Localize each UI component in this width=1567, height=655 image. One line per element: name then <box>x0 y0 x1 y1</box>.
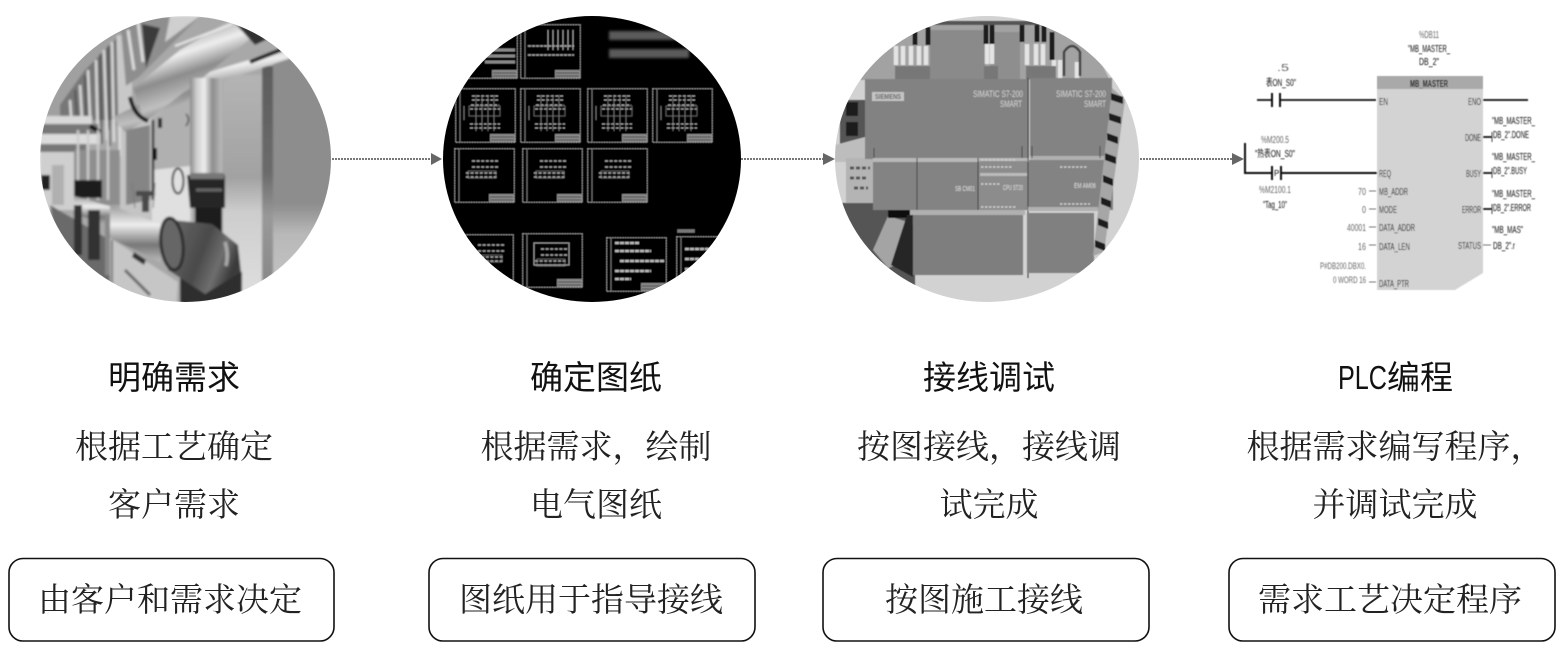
photo: Siemens PLC wiring <box>835 16 1140 303</box>
ladder diagram: MB_MASTER block: MB_MASTER <box>1410 79 1448 90</box>
heading: PLC编程: PLC <box>1338 359 1387 396</box>
text block: step 4 description: 并调试完成 <box>1312 479 1478 526</box>
photo: Siemens PLC wiring: SIMATIC S7-200 <box>1056 89 1106 99</box>
heading: 接线调试: 接线调试 <box>923 360 1055 399</box>
ladder diagram: MB_MASTER block: 40001 <box>1347 223 1366 234</box>
ladder diagram: MB_MASTER block: .5 <box>1277 63 1290 74</box>
photo: Siemens PLC wiring: SIEMENS <box>875 94 901 101</box>
photo: electrical drawings <box>443 16 741 302</box>
ladder diagram: MB_MASTER block: 0 <box>1362 205 1366 216</box>
heading: 确定图纸: 确定图纸 <box>530 360 662 399</box>
ladder diagram: MB_MASTER block: DONE <box>1465 133 1481 144</box>
ladder diagram: MB_MASTER block: 16 <box>1358 242 1366 253</box>
photo: Siemens PLC wiring: SIMATIC S7-200 <box>973 89 1023 99</box>
ladder diagram: MB_MASTER block: ENO <box>1468 97 1481 108</box>
text block: step 2 description: 根据需求，绘制 <box>480 421 712 468</box>
ladder diagram: MB_MASTER block: "Tag_10" <box>1263 200 1287 211</box>
ladder diagram: MB_MASTER block: DB_2".DONE <box>1493 130 1529 141</box>
heading: 明确需求: 明确需求 <box>108 360 240 399</box>
ladder diagram: MB_MASTER block: DB_2" <box>1419 57 1439 68</box>
ladder diagram: MB_MASTER block: DB_2".ERROR <box>1493 203 1531 214</box>
text block: step 4 description: 根据需求编写程序， <box>1246 421 1544 468</box>
ladder diagram: MB_MASTER block: 70 <box>1358 187 1366 198</box>
ladder diagram: MB_MASTER block: 0 WORD 16 <box>1333 275 1366 285</box>
ladder diagram: MB_MASTER block: MB_ADDR <box>1379 187 1408 198</box>
callout: step 3 <box>823 558 1149 641</box>
ladder diagram: MB_MASTER block: DATA_LEN <box>1379 242 1410 253</box>
text block: step 4 description <box>1246 421 1544 526</box>
heading: PLC编程: 编程 <box>1387 360 1453 399</box>
callout: step 1: 由客户和需求决定 <box>38 574 302 621</box>
text block: step 2 description: 电气图纸 <box>530 479 662 526</box>
ladder diagram: MB_MASTER block: "MB_MAS" <box>1492 225 1523 236</box>
ladder diagram: MB_MASTER block: P#DB200.DBX0. <box>1320 261 1366 271</box>
text block: step 1 description <box>75 421 273 526</box>
text block: step 3 description <box>857 421 1121 526</box>
text block: step 2 description <box>480 421 712 526</box>
callout: step 2 <box>429 558 755 641</box>
callout: step 4: 需求工艺决定程序 <box>1258 574 1522 621</box>
photo: Siemens PLC wiring: SMART <box>1084 99 1106 109</box>
ladder diagram: MB_MASTER block: 表ON_S0" <box>1266 76 1296 89</box>
ladder diagram: MB_MASTER block: EN <box>1379 97 1388 108</box>
heading: PLC编程 <box>1338 359 1453 399</box>
ladder diagram: MB_MASTER block: %DB11 <box>1419 30 1439 41</box>
callout: step 1 <box>9 558 334 641</box>
photo: industrial piping <box>40 16 333 310</box>
ladder diagram: MB_MASTER block: REQ <box>1379 169 1391 180</box>
ladder diagram: MB_MASTER block <box>1245 30 1535 290</box>
ladder diagram: MB_MASTER block: DATA_ADDR <box>1379 223 1415 234</box>
photo: Siemens PLC wiring: CPU ST20 <box>1003 185 1023 192</box>
arrow: step 1 to step 2 <box>332 153 442 165</box>
ladder diagram: MB_MASTER block: STATUS <box>1458 241 1481 252</box>
callout: step 2: 图纸用于指导接线 <box>459 574 723 621</box>
ladder diagram: MB_MASTER block: %M200.5 <box>1261 135 1289 146</box>
photo: Siemens PLC wiring: SMART <box>1000 99 1022 109</box>
ladder diagram: MB_MASTER block: P <box>1274 169 1279 178</box>
text block: step 3 description: 试完成 <box>940 479 1038 526</box>
ladder diagram: MB_MASTER block: DATA_PTR <box>1379 279 1409 290</box>
ladder diagram: MB_MASTER block: "MB_MASTER_ <box>1408 44 1450 55</box>
text block: step 1 description: 根据工艺确定 <box>75 421 273 468</box>
ladder diagram: MB_MASTER block: "热表ON_S0" <box>1255 147 1295 160</box>
ladder diagram: MB_MASTER block: MODE <box>1379 205 1397 216</box>
photo: Siemens PLC wiring: SB CM01 <box>955 186 975 193</box>
text block: step 1 description: 客户需求 <box>108 479 240 526</box>
ladder diagram: MB_MASTER block: %M2100.1 <box>1259 185 1291 196</box>
ladder diagram: MB_MASTER block: BUSY <box>1466 169 1481 180</box>
ladder diagram: MB_MASTER block: DB_2".BUSY <box>1493 166 1527 177</box>
callout: step 3: 按图施工接线 <box>885 574 1083 621</box>
text block: step 3 description: 按图接线，接线调 <box>857 421 1121 468</box>
ladder diagram: MB_MASTER block: DB_2".r <box>1493 241 1515 252</box>
ladder diagram: MB_MASTER block: "MB_MASTER_ <box>1492 152 1535 163</box>
ladder diagram: MB_MASTER block: "MB_MASTER_ <box>1492 116 1535 127</box>
ladder diagram: MB_MASTER block: ERROR <box>1462 205 1481 216</box>
arrow: step 3 to step 4 <box>1140 153 1244 165</box>
photo: Siemens PLC wiring: EM AM06 <box>1074 183 1096 190</box>
callout: step 4 <box>1229 558 1555 641</box>
arrow: step 2 to step 3 <box>741 153 835 165</box>
ladder diagram: MB_MASTER block: "MB_MASTER_ <box>1492 189 1535 200</box>
